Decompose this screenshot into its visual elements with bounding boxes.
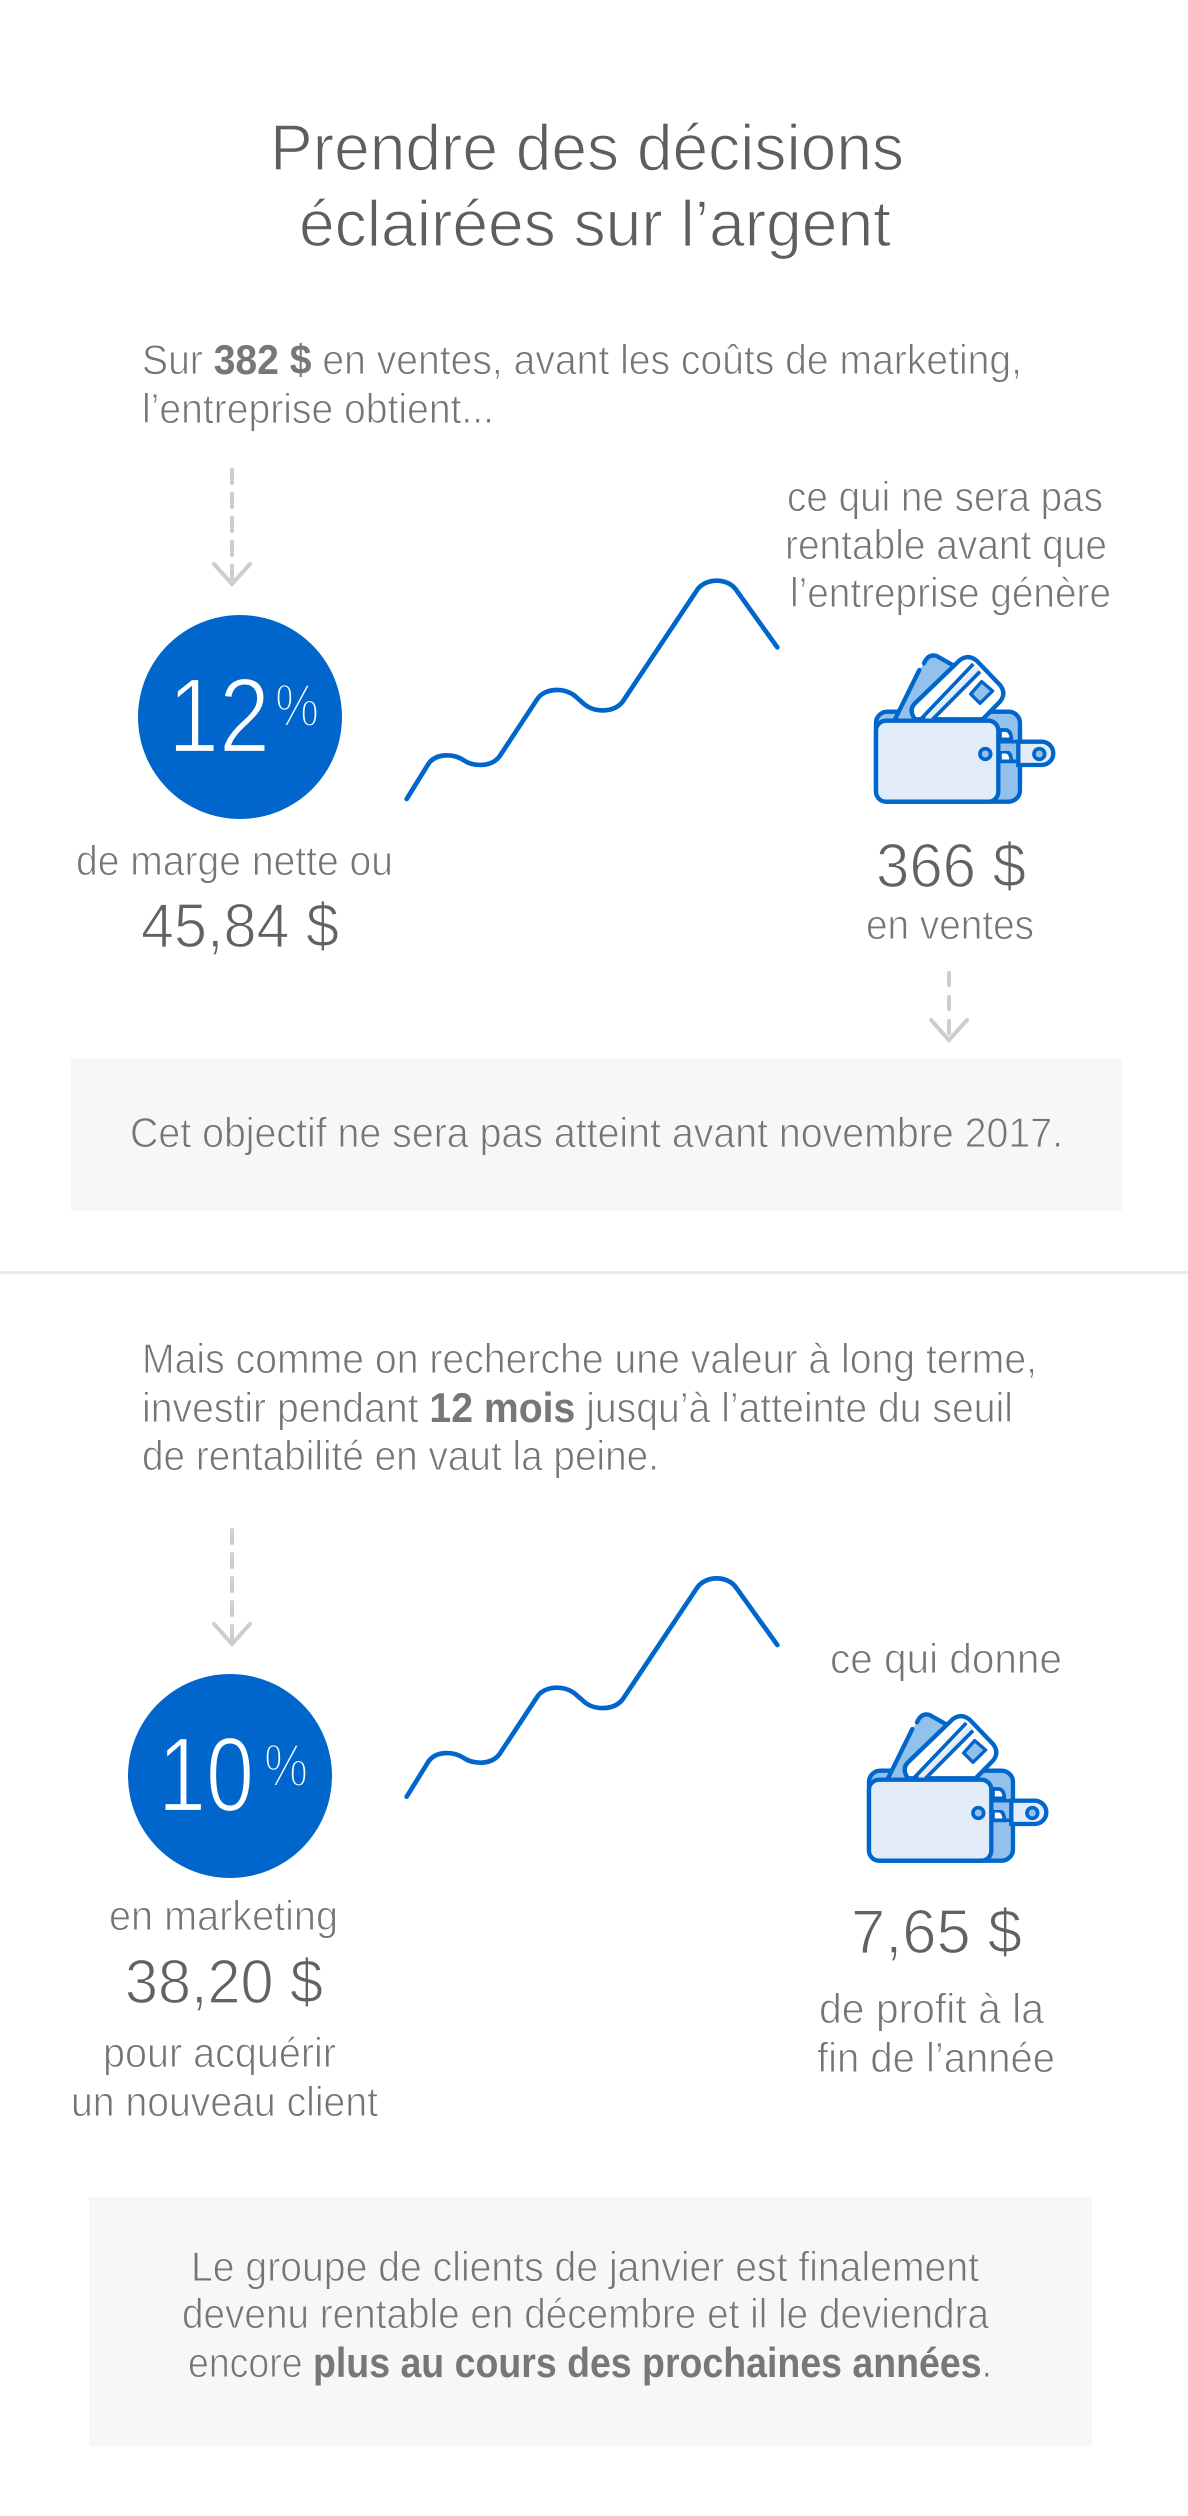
text: not profitable until: ce qui ne sera pas — [787, 473, 1103, 520]
acquisition label: pour acquérir — [103, 2029, 336, 2076]
circle: 12 percent: 12 — [168, 657, 270, 775]
arrow: to 12 percent — [214, 470, 250, 584]
profit label: fin de l’année — [817, 2034, 1055, 2081]
text: which gives: ce qui donne — [830, 1635, 1062, 1682]
intro text: 382 $ en ventes: Sur 382 $ en ventes, avant les coûts de marketing, — [142, 336, 1022, 383]
sales label: en ventes — [866, 901, 1034, 948]
title: éclairées sur l’argent — [299, 187, 891, 260]
callout: goal box: Cet objectif ne sera pas atteint avant novembre 2017. — [130, 1109, 1063, 1156]
text: long-term value: investir pendant 12 mois jusqu’à l’atteinte du seuil — [142, 1384, 1013, 1431]
callout: goal box — [71, 1059, 1122, 1211]
acquisition label — [71, 2029, 378, 2125]
callout: conclusion box: Le groupe de clients de janvier est finalement — [191, 2243, 979, 2290]
profit label — [817, 1985, 1055, 2081]
net margin amount: 45,84 $ — [141, 892, 339, 961]
marketing label: en marketing — [109, 1892, 338, 1939]
icon: wallet 2 — [869, 1714, 1046, 1861]
circle: 10 percent: % — [264, 1732, 308, 1799]
sales amount: 366 $ — [876, 832, 1026, 901]
text: not profitable until: l’entreprise génère — [790, 569, 1111, 616]
line chart 2 — [407, 1578, 777, 1797]
acquisition label: un nouveau client — [71, 2078, 378, 2125]
title — [270, 111, 904, 260]
title: Prendre des décisions — [270, 111, 904, 184]
profit amount: 7,65 $ — [851, 1898, 1022, 1967]
text: long-term value: de rentabilité en vaut la peine. — [142, 1432, 659, 1479]
callout: conclusion box: devenu rentable en décembre et il le deviendra — [182, 2290, 990, 2337]
circle: 10 percent: 10 — [158, 1716, 254, 1834]
intro text: 382 $ en ventes: l’entreprise obtient... — [142, 385, 494, 432]
callout: conclusion box: encore plus au cours des prochaines années. — [188, 2339, 992, 2386]
text: not profitable until: rentable avant que — [785, 521, 1107, 568]
arrow: to goal box — [931, 973, 967, 1040]
marketing amount: 38,20 $ — [125, 1948, 323, 2017]
profit label: de profit à la — [819, 1985, 1045, 2032]
circle: 12 percent — [138, 615, 342, 819]
text: long-term value — [142, 1335, 1037, 1479]
callout: conclusion box — [89, 2197, 1092, 2446]
text: not profitable until — [785, 473, 1111, 616]
text: long-term value: Mais comme on recherche une valeur à long terme, — [142, 1335, 1037, 1382]
intro text: 382 $ en ventes — [142, 336, 1022, 432]
icon: wallet 1 — [876, 655, 1053, 802]
circle: 12 percent: % — [275, 672, 319, 739]
circle: 10 percent — [128, 1674, 332, 1878]
arrow: to 10 percent — [214, 1530, 250, 1644]
net margin label: de marge nette ou — [76, 837, 393, 884]
line chart 1 — [407, 581, 777, 799]
